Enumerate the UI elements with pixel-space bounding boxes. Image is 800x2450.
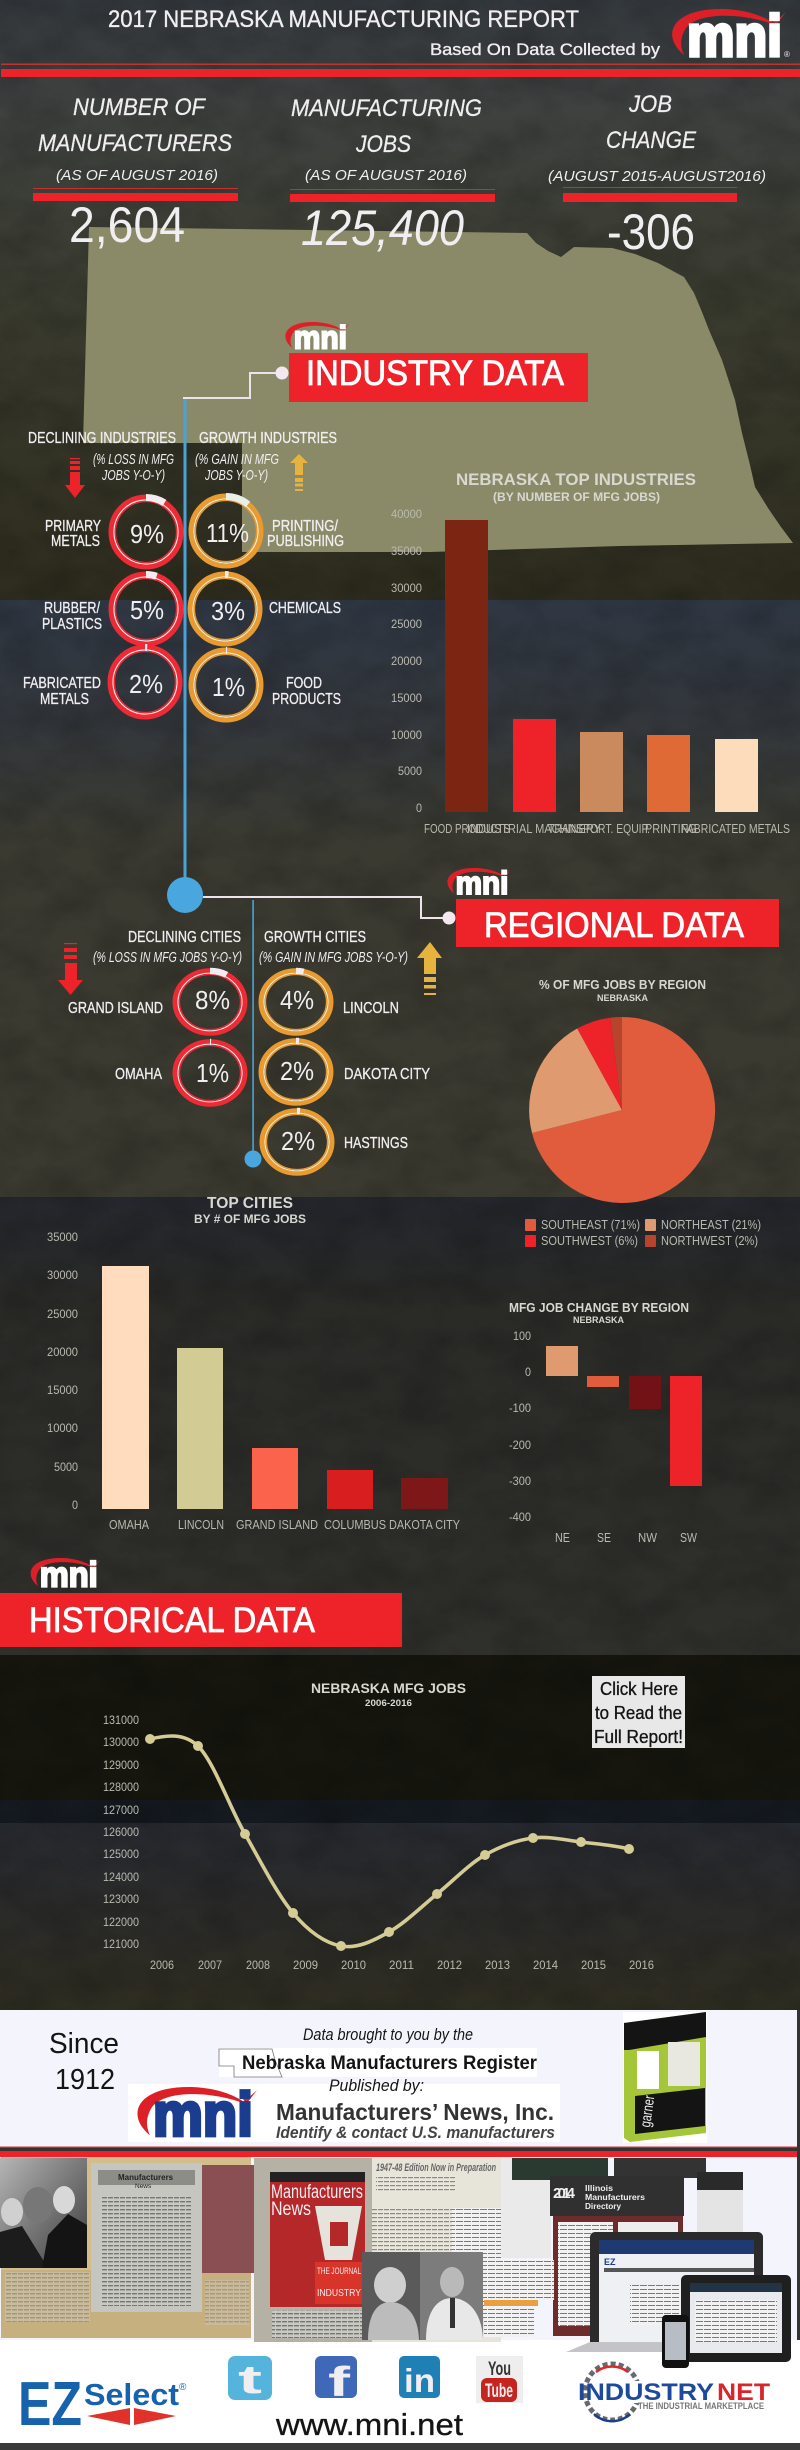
button: read the full report: Click Here — [600, 1679, 678, 1699]
stat: manufacturing jobs: JOBS — [355, 131, 411, 158]
icon: YouTube: Tube — [485, 2381, 513, 2402]
chart: Nebraska mfg jobs line chart: 122000 — [103, 1915, 139, 1929]
panel: growth cities: GROWTH CITIES — [264, 929, 366, 946]
panel: declining cities — [58, 929, 245, 1104]
label: fabricated metals: FABRICATED — [23, 675, 101, 692]
document: 1947-48 edition notice: 1947-48 Edition Now in Preparation — [376, 2162, 496, 2174]
panel: growth industries: JOBS Y-O-Y) — [204, 468, 268, 484]
label: rubber plastics: RUBBER/ — [44, 600, 101, 617]
label: food products — [272, 675, 341, 708]
chart: top cities bar chart — [47, 1195, 460, 1532]
chart: top cities bar chart: 5000 — [54, 1460, 78, 1474]
chart: Nebraska top industries bar chart: 30000 — [391, 581, 422, 595]
chart: Nebraska top industries bar chart: INDUSTRIAL MACHINERY — [467, 821, 601, 836]
chart: Nebraska top industries bar chart: PRINTING — [645, 821, 697, 836]
chart: top cities bar chart: 15000 — [47, 1383, 78, 1397]
chart: Nebraska mfg jobs line chart: 130000 — [103, 1735, 139, 1749]
chart: job change by region bar chart: SE — [597, 1530, 611, 1545]
chart: job change by region bar chart: MFG JOB CHANGE BY REGION — [509, 1301, 689, 1315]
label: rubber plastics — [42, 600, 102, 633]
document: magazine cover: Manufacturers — [271, 2182, 363, 2203]
chart: Nebraska top industries bar chart: 25000 — [391, 617, 422, 631]
chart: Nebraska top industries bar chart: 40000 — [391, 507, 422, 521]
icon: Facebook — [315, 2356, 357, 2405]
stat: job change: CHANGE — [606, 127, 697, 154]
chart: Nebraska mfg jobs line chart: 123000 — [103, 1892, 139, 1906]
icon: LinkedIn: in — [404, 2362, 435, 2399]
chart: top cities bar chart: DAKOTA CITY — [389, 1517, 460, 1532]
button: read the full report: to Read the — [595, 1703, 682, 1723]
logo: mni regional section: mni — [456, 865, 508, 901]
chart: Nebraska mfg jobs line chart: 2013 — [485, 1958, 510, 1972]
chart: job change by region bar chart: SW — [680, 1530, 698, 1545]
ring: Lincoln 4%: 4% — [280, 985, 314, 1015]
legend: region pie: NORTHWEST (2%) — [661, 1233, 758, 1248]
button: read the full report: Full Report! — [594, 1727, 683, 1747]
chart: job change by region bar chart: -100 — [509, 1401, 531, 1415]
label: fabricated metals — [23, 675, 101, 708]
panel: declining industries: JOBS Y-O-Y) — [101, 468, 165, 484]
ring: chemicals 3%: 3% — [211, 596, 245, 626]
icon: red down arrow — [65, 458, 85, 498]
logo: EZ Select — [18, 2370, 187, 2439]
photo: two men, black and white — [0, 2158, 87, 2268]
icon: gold up arrow — [417, 942, 442, 995]
ring: food products 1% — [191, 650, 261, 720]
header: report title: Based On Data Collected by — [430, 40, 661, 59]
stat: job change: -306 — [607, 204, 695, 260]
text: published by: Published by: — [329, 2076, 424, 2095]
ring: Dakota City 2%: 2% — [280, 1056, 314, 1086]
document: magazine cover — [254, 2158, 372, 2342]
panel: growth industries — [190, 430, 344, 720]
chart: Nebraska mfg jobs line chart: 2007 — [198, 1958, 222, 1972]
label: Hastings: HASTINGS — [344, 1135, 408, 1152]
chart: job change by region bar chart: 0 — [525, 1365, 531, 1379]
label: Lincoln: LINCOLN — [343, 1000, 399, 1017]
label: Dakota City: DAKOTA CITY — [344, 1066, 430, 1083]
chart: Nebraska mfg jobs line chart: 125000 — [103, 1847, 139, 1861]
chart: top cities bar chart: 30000 — [47, 1268, 78, 1282]
panel: declining industries: DECLINING INDUSTRIES — [28, 430, 176, 447]
document: state directories: Directory — [585, 2202, 622, 2211]
publisher block: mni logo and Manufacturers' News: Manufacturers’ News, Inc. — [276, 2099, 554, 2125]
chart: job change by region bar chart: NE — [555, 1530, 570, 1545]
ring: Grand Island 8% — [175, 970, 245, 1034]
document: Manufacturers News page: News — [135, 2183, 152, 2190]
heading: industry data: INDUSTRY DATA — [306, 354, 565, 393]
label: printing publishing: PUBLISHING — [267, 533, 344, 550]
chart: Nebraska mfg jobs line chart: 121000 — [103, 1937, 139, 1951]
title: Nebraska Manufacturers Register — [219, 2048, 538, 2077]
chart: Nebraska mfg jobs line chart: 131000 — [103, 1713, 139, 1727]
legend: region pie — [525, 1217, 761, 1248]
logo: mni header: ® — [784, 50, 790, 59]
heading: regional data — [456, 899, 779, 947]
chart: Nebraska top industries bar chart: 0 — [416, 801, 422, 815]
map: Nebraska state silhouette — [83, 227, 793, 552]
label: chemicals: CHEMICALS — [269, 600, 341, 617]
icon: laptop with website — [566, 2232, 763, 2352]
document: magazine cover: News — [271, 2199, 311, 2220]
panel: declining cities: (% LOSS IN MFG JOBS Y-O-Y) — [93, 950, 242, 966]
ring: primary metals 9% — [111, 497, 181, 567]
stat: job change: JOB — [628, 91, 672, 118]
panel: footer collage and links — [0, 2157, 800, 2443]
logo: IndustryNet: INDUSTRY — [578, 2379, 714, 2406]
chart: Nebraska mfg jobs line chart: 2009 — [293, 1958, 318, 1972]
icon: phone — [662, 2315, 689, 2368]
chart: job change by region bar chart — [509, 1301, 702, 1545]
book: Nebraska Manufacturers Register directory — [623, 2012, 707, 2143]
publisher block: mni logo and Manufacturers' News: Identify & contact U.S. manufacturers — [276, 2124, 555, 2142]
chart: top cities bar chart: 20000 — [47, 1345, 78, 1359]
panel: growth cities — [259, 929, 442, 1174]
icon: LinkedIn — [399, 2356, 440, 2399]
stat: manufacturing jobs: (AS OF AUGUST 2016) — [305, 168, 467, 184]
label: food products: PRODUCTS — [272, 691, 341, 708]
chart: Nebraska top industries bar chart: (BY NUMBER OF MFG JOBS) — [493, 490, 660, 504]
ring: printing publishing 11%: 11% — [206, 518, 249, 548]
ring: Lincoln 4% — [261, 970, 331, 1034]
stat: manufacturing jobs — [290, 95, 495, 256]
ring: fabricated metals 2% — [110, 647, 180, 717]
photo: open historic book — [1, 2157, 255, 2338]
chart: Nebraska top industries bar chart — [391, 470, 790, 836]
chart: top cities bar chart: 25000 — [47, 1307, 78, 1321]
icon: gold up arrow — [290, 454, 308, 491]
logo: EZ Select: Select — [84, 2377, 179, 2412]
document: Manufacturers News page: Manufacturers — [118, 2173, 174, 2182]
legend: region pie: SOUTHEAST (71%) — [541, 1217, 640, 1232]
chart: top cities bar chart: 10000 — [47, 1421, 78, 1435]
panel: publisher credits — [0, 2010, 797, 2148]
panel: declining cities: DECLINING CITIES — [128, 929, 241, 946]
icon: Twitter: t — [238, 2358, 262, 2402]
chart: Nebraska top industries bar chart: 15000 — [391, 691, 422, 705]
panel: growth industries: GROWTH INDUSTRIES — [199, 430, 337, 447]
chart: top cities bar chart: 0 — [72, 1498, 78, 1512]
text: since 1912: Since — [49, 2028, 119, 2060]
button: read the full report — [592, 1676, 685, 1748]
document: 1947-48 edition notice — [372, 2158, 538, 2342]
chart: percent of jobs by region pie: % OF MFG JOBS BY REGION — [539, 978, 706, 992]
stat: number of manufacturers: NUMBER OF — [73, 94, 206, 121]
label: primary metals: METALS — [51, 533, 100, 550]
document: state directories: Illinois — [585, 2184, 614, 2193]
chart: percent of jobs by region pie — [529, 978, 715, 1203]
icon: YouTube: You — [488, 2359, 511, 2380]
document: Manufacturers News page — [91, 2163, 202, 2312]
connector: industry timeline — [167, 366, 456, 924]
label: printing publishing — [267, 518, 344, 550]
chart: top cities bar chart: OMAHA — [109, 1517, 149, 1532]
ring: fabricated metals 2%: 2% — [129, 669, 163, 699]
stat: number of manufacturers: MANUFACTURERS — [38, 130, 232, 157]
chart: Nebraska mfg jobs line chart — [103, 1680, 654, 1972]
ring: Omaha 1%: 1% — [196, 1058, 229, 1088]
document: state directories: 2014 — [553, 2185, 576, 2202]
chart: job change by region bar chart: 100 — [513, 1329, 531, 1343]
ring: primary metals 9%: 9% — [130, 519, 164, 549]
panel: declining industries: (% LOSS IN MFG — [93, 452, 174, 468]
chart: Nebraska mfg jobs line chart: 127000 — [103, 1803, 139, 1817]
logo: IndustryNet: NET — [717, 2379, 770, 2406]
chart: Nebraska mfg jobs line chart: 128000 — [103, 1780, 139, 1794]
chart: Nebraska mfg jobs line chart: 2015 — [581, 1958, 606, 1972]
ring: Dakota City 2% — [261, 1040, 331, 1104]
chart: top cities bar chart: 35000 — [47, 1230, 78, 1244]
icon: red down arrow — [58, 943, 83, 995]
connector: regional timeline — [244, 900, 262, 1168]
text: since 1912: 1912 — [55, 2064, 115, 2096]
chart: job change by region bar chart: NEBRASKA — [573, 1315, 624, 1326]
text: data brought to you by: Data brought to you by the — [303, 2025, 473, 2044]
stat: manufacturing jobs: MANUFACTURING — [291, 95, 482, 122]
legend: region pie: NORTHEAST (21%) — [661, 1217, 761, 1232]
chart: Nebraska top industries bar chart: 5000 — [398, 764, 422, 778]
chart: Nebraska mfg jobs line chart: 2016 — [629, 1958, 654, 1972]
chart: top cities bar chart: LINCOLN — [178, 1517, 224, 1532]
publisher block: mni logo and Manufacturers' News: mni — [153, 2080, 253, 2148]
chart: job change by region bar chart: NW — [638, 1530, 658, 1545]
publisher block: mni logo and Manufacturers' News — [128, 2080, 560, 2148]
header: report title: 2017 NEBRASKA MANUFACTURING REPORT — [108, 6, 579, 33]
ring: Hastings 2%: 2% — [281, 1126, 315, 1156]
chart: Nebraska top industries bar chart: FOOD PRODUCTS — [424, 821, 510, 836]
chart: Nebraska mfg jobs line chart: 2006-2016 — [365, 1698, 412, 1709]
document: magazine cover: THE JOURNAL — [317, 2266, 361, 2276]
label: printing publishing: PRINTING/ — [272, 518, 339, 535]
chart: Nebraska mfg jobs line chart: 2014 — [533, 1958, 558, 1972]
label: primary metals — [45, 518, 101, 550]
stat: manufacturing jobs: 125,400 — [301, 200, 464, 256]
stat: number of manufacturers: 2,604 — [69, 197, 185, 253]
document: magazine cover: INDUSTRY — [317, 2288, 361, 2299]
chart: Nebraska top industries bar chart: TRANSPORT. EQUIP. — [548, 821, 650, 836]
ring: Hastings 2% — [262, 1110, 332, 1174]
chart: Nebraska top industries bar chart: 35000 — [391, 544, 422, 558]
ring: rubber plastics 5% — [111, 574, 181, 644]
chart: Nebraska top industries bar chart: 10000 — [391, 728, 422, 742]
chart: Nebraska mfg jobs line chart: 2008 — [246, 1958, 270, 1972]
ring: food products 1%: 1% — [212, 672, 245, 702]
chart: Nebraska top industries bar chart: 20000 — [391, 654, 422, 668]
chart: top cities bar chart: COLUMBUS — [324, 1517, 386, 1532]
chart: top cities bar chart: TOP CITIES — [207, 1195, 293, 1212]
stat: job change: (AUGUST 2015-AUGUST2016) — [548, 169, 766, 185]
label: Omaha: OMAHA — [115, 1066, 163, 1083]
header: report title — [108, 6, 661, 59]
ring: Omaha 1% — [175, 1042, 245, 1104]
chart: Nebraska top industries bar chart: NEBRASKA TOP INDUSTRIES — [456, 470, 696, 489]
stat: number of manufacturers — [33, 94, 238, 253]
icon: tablet — [681, 2275, 791, 2362]
document: state directories — [484, 2158, 743, 2336]
chart: Nebraska mfg jobs line chart: 2011 — [389, 1958, 414, 1972]
icon: laptop with website: EZ — [604, 2257, 616, 2267]
link: www.mni.net: www.mni.net — [275, 2407, 463, 2442]
stat: job change — [548, 91, 766, 260]
chart: Nebraska mfg jobs line chart: 2006 — [150, 1958, 174, 1972]
ring: printing publishing 11% — [191, 496, 261, 566]
chart: job change by region bar chart: -200 — [509, 1438, 531, 1452]
icon: Twitter — [228, 2356, 272, 2402]
photo: two portraits — [362, 2252, 483, 2340]
logo: EZ Select: EZ — [18, 2370, 82, 2439]
stat: number of manufacturers: (AS OF AUGUST 2016) — [56, 168, 218, 184]
logo: IndustryNet — [578, 2364, 770, 2421]
heading: historical data — [0, 1593, 402, 1647]
logo: mni header: mni — [687, 4, 782, 69]
chart: top cities bar chart: GRAND ISLAND — [236, 1517, 318, 1532]
book: Nebraska Manufacturers Register directory: garner — [637, 2094, 658, 2128]
chart: Nebraska mfg jobs line chart: 129000 — [103, 1758, 139, 1772]
label: primary metals: PRIMARY — [45, 518, 101, 535]
logo: IndustryNet: THE INDUSTRIAL MARKETPLACE — [638, 2401, 764, 2411]
title: Nebraska Manufacturers Register: Nebraska Manufacturers Register — [242, 2053, 538, 2074]
ring: rubber plastics 5%: 5% — [130, 595, 164, 625]
chart: job change by region bar chart: -300 — [509, 1474, 531, 1488]
ring: Grand Island 8%: 8% — [195, 985, 230, 1015]
chart: Nebraska mfg jobs line chart: 126000 — [103, 1825, 139, 1839]
chart: Nebraska mfg jobs line chart: 124000 — [103, 1870, 139, 1884]
heading: regional data: REGIONAL DATA — [484, 906, 745, 945]
chart: Nebraska mfg jobs line chart: 2012 — [437, 1958, 462, 1972]
label: food products: FOOD — [286, 675, 322, 692]
label: Grand Island: GRAND ISLAND — [68, 1000, 163, 1017]
header red rule — [1, 64, 800, 77]
chart: top cities bar chart: BY # OF MFG JOBS — [194, 1212, 306, 1226]
chart: percent of jobs by region pie: NEBRASKA — [597, 993, 648, 1004]
logo: mni industry section: mni — [294, 319, 347, 355]
legend: region pie: SOUTHWEST (6%) — [541, 1233, 638, 1248]
label: rubber plastics: PLASTICS — [42, 616, 102, 633]
heading: historical data: HISTORICAL DATA — [29, 1601, 316, 1640]
document: state directories: Manufacturers — [585, 2193, 646, 2202]
logo: EZ Select: ® — [179, 2382, 187, 2393]
label: fabricated metals: METALS — [40, 691, 89, 708]
panel: growth industries: (% GAIN IN MFG — [195, 452, 279, 468]
ring: chemicals 3% — [190, 574, 260, 644]
text: since 1912 — [49, 2028, 119, 2096]
chart: Nebraska mfg jobs line chart: NEBRASKA MFG JOBS — [311, 1680, 466, 1696]
chart: Nebraska mfg jobs line chart: 2010 — [341, 1958, 366, 1972]
chart: job change by region bar chart: -400 — [509, 1510, 531, 1524]
icon: Facebook: f — [328, 2358, 352, 2405]
panel: declining industries — [23, 430, 181, 717]
divider: lower red rule — [0, 2146, 797, 2157]
icon: YouTube — [476, 2356, 523, 2403]
panel: growth cities: (% GAIN IN MFG JOBS Y-O-Y) — [259, 950, 408, 966]
logo: mni historical section: mni — [40, 1556, 98, 1595]
